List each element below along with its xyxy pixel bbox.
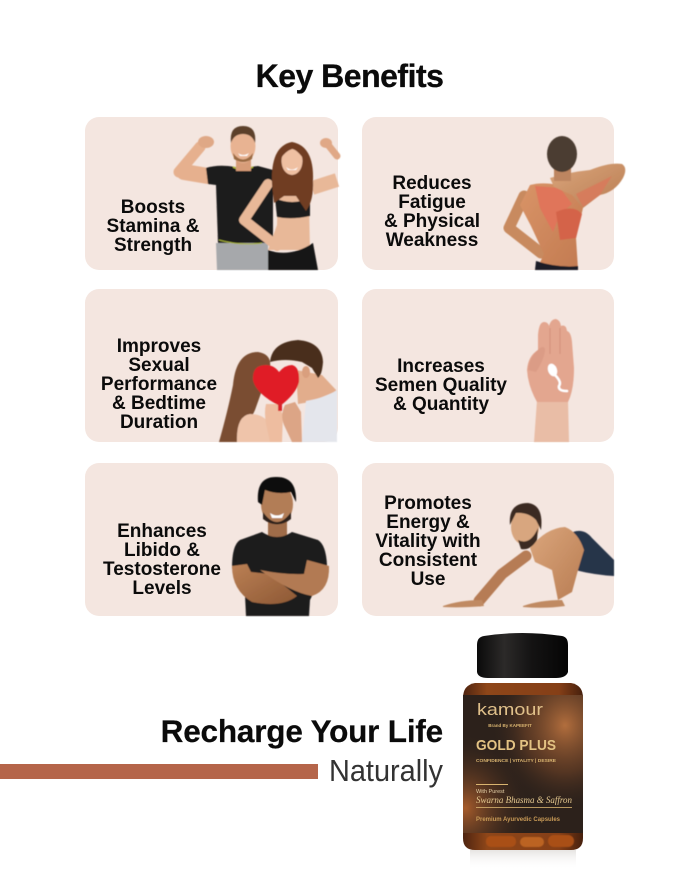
illustration: man's back with muscles <box>509 136 625 270</box>
heading: promotes energy: Use <box>411 569 445 590</box>
bottle label <box>463 695 583 833</box>
heading: promotes energy: Consistent <box>379 550 478 571</box>
heading: reduces fatigue: Fatigue <box>398 192 466 213</box>
illustration: man doing push-up <box>443 503 614 608</box>
bottle body <box>463 683 583 850</box>
bottle reflection <box>470 850 576 870</box>
panel: increases semen quality <box>362 289 614 442</box>
heading: improves sexual performance: Sexual <box>128 355 190 376</box>
heading: boosts stamina: Boosts <box>121 197 185 218</box>
illustration: smiling man with crossed arms <box>232 477 329 616</box>
illustration: open hand with sperm shape <box>527 319 574 442</box>
with purest: With Purest <box>476 789 505 795</box>
tagline: recharge your life: Recharge Your Life <box>161 713 443 749</box>
heading: reduces fatigue: & Physical <box>384 211 480 232</box>
heading: enhances libido: Levels <box>132 578 192 599</box>
heading: boosts stamina: Stamina & <box>107 216 200 237</box>
title: Key Benefits <box>256 58 443 94</box>
panel: improves sexual performance <box>85 289 338 442</box>
heading: improves sexual performance: Performance <box>101 374 217 395</box>
heading: enhances libido: Testosterone <box>103 559 221 580</box>
gold rule <box>476 806 572 809</box>
heading: reduces fatigue: Reduces <box>392 173 472 194</box>
product claims: CONFIDENCE | VITALITY | DESIRE <box>476 758 557 764</box>
heading: promotes energy: Vitality with <box>375 531 481 552</box>
heading: enhances libido: Libido & <box>124 540 200 561</box>
accent bar <box>0 764 318 779</box>
panel: enhances libido <box>85 463 338 616</box>
panel: reduces fatigue <box>362 117 625 270</box>
heading: increases semen quality: Increases <box>397 356 485 377</box>
illustration: man and woman flexing <box>179 126 337 270</box>
heading: promotes energy: Energy & <box>386 512 470 533</box>
bottle cap <box>477 633 568 678</box>
heading: increases semen quality: & Quantity <box>393 394 489 415</box>
capsule descriptor: Premium Ayurvedic Capsules <box>476 816 561 823</box>
heading: boosts stamina: Strength <box>114 235 192 256</box>
product name: GOLD PLUS <box>476 737 556 754</box>
heading: improves sexual performance: Improves <box>117 336 201 357</box>
capsules <box>486 835 574 847</box>
heading: improves sexual performance: & Bedtime <box>112 393 206 414</box>
illustration: couple kissing behind a red heart <box>219 340 337 442</box>
heading: improves sexual performance: Duration <box>120 412 198 433</box>
brand logo: kamour <box>477 700 543 719</box>
panel: promotes energy and vitality <box>362 463 614 616</box>
ingredients: Swarna Bhasma & Saffron <box>476 795 572 805</box>
panel: boosts stamina and strength <box>85 117 338 270</box>
heading: promotes energy: Promotes <box>384 493 472 514</box>
gold rule <box>476 784 508 785</box>
tagline: naturally: Naturally <box>329 753 443 788</box>
heading: enhances libido: Enhances <box>117 521 207 542</box>
product bottle <box>463 633 583 870</box>
heading: reduces fatigue: Weakness <box>386 230 478 251</box>
brand line: Brand By KAPEEFIT <box>488 723 532 728</box>
heading: increases semen quality: Semen Quality <box>375 375 507 396</box>
